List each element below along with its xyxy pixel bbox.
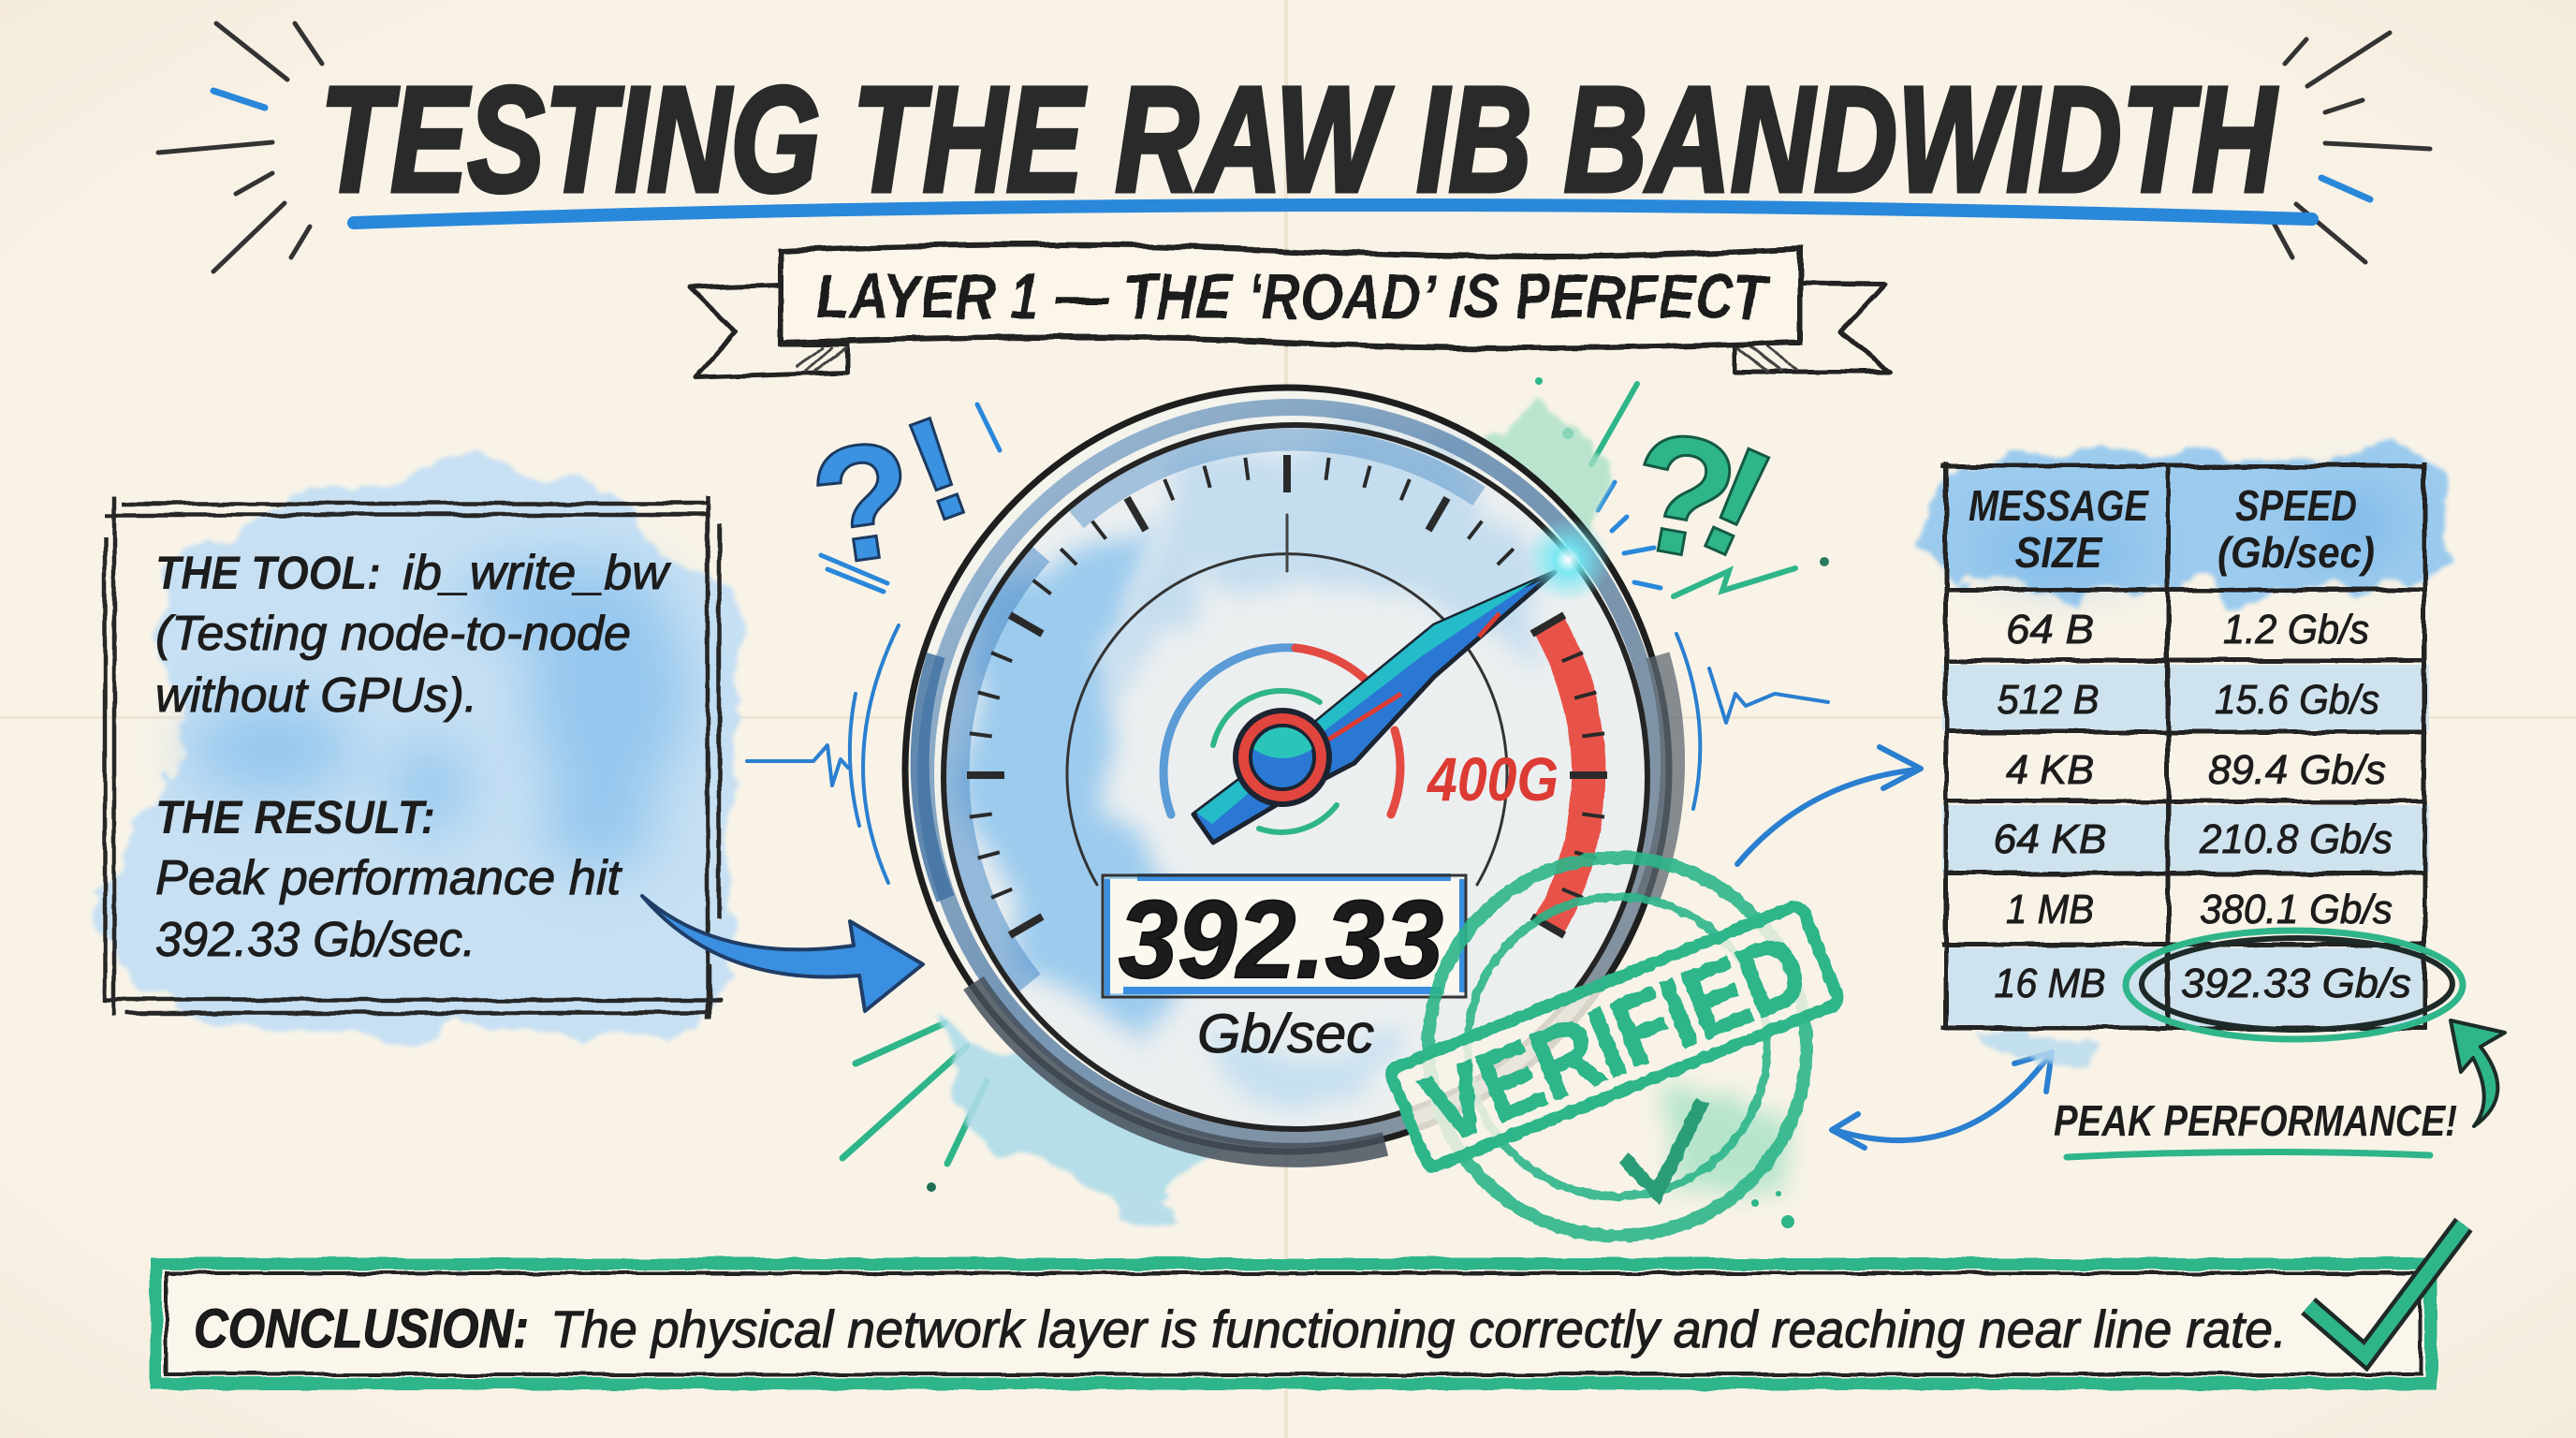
tool text: THE TOOL: — [155, 547, 381, 599]
red zone — [1548, 624, 1588, 926]
table rows: 64 B — [2006, 607, 2094, 653]
conclusion panel — [156, 1225, 2464, 1384]
arrow: gauge to table — [1737, 747, 1921, 864]
peak performance label: PEAK PERFORMANCE! — [2054, 1096, 2457, 1145]
arrow: stamp to table (double headed) — [1832, 1052, 2052, 1148]
blue question and exclamation marks: ? — [801, 406, 926, 601]
stamp banner — [1389, 903, 1842, 1173]
data table — [1919, 449, 2463, 1063]
result text: 392.33 Gb/sec. — [155, 913, 476, 967]
tool text: (Testing node-to-node — [155, 607, 631, 661]
vibration and pulse lines — [747, 625, 1828, 883]
wash darker patches — [187, 562, 688, 871]
peak value highlight — [2126, 931, 2463, 1039]
gauge — [905, 388, 1673, 1155]
title sunburst strokes — [158, 23, 2430, 271]
table header: SIZE — [2014, 528, 2103, 577]
tool text: ib_write_bw — [402, 546, 672, 600]
ribbon banner — [691, 245, 1890, 377]
table header — [1969, 481, 2375, 577]
table rows: 64 KB — [1994, 816, 2106, 862]
arrow: label to peak value — [2451, 1020, 2505, 1126]
conclusion text: The physical network layer is functioning correctly and reaching near line rate. — [550, 1299, 2287, 1358]
table rows: 210.8 Gb/s — [2199, 816, 2393, 862]
verified stamp — [1389, 858, 1842, 1236]
gauge face — [905, 388, 1669, 1152]
table header: SPEED — [2235, 481, 2357, 530]
table washes — [1919, 449, 2452, 1063]
table rows: 512 B — [1998, 677, 2099, 723]
table rows: 15.6 Gb/s — [2215, 677, 2379, 723]
title underline — [354, 205, 2312, 223]
table rows: 392.33 Gb/s — [2181, 961, 2411, 1006]
table rows: 89.4 Gb/s — [2208, 747, 2386, 793]
watercolour splashes behind gauge — [936, 403, 1788, 1236]
readout number: 392.33 — [1119, 878, 1443, 1002]
400G label: 400G — [1426, 744, 1559, 814]
table header: (Gb/sec) — [2217, 528, 2375, 577]
green burst lines lower left — [842, 1023, 987, 1192]
panel frame — [105, 496, 721, 1020]
conclusion frame — [156, 1264, 2431, 1384]
table rows: 380.1 Gb/s — [2200, 887, 2393, 932]
table rows: 1 MB — [2006, 887, 2094, 932]
blue question and exclamation marks: ! — [886, 384, 988, 553]
needle — [1193, 572, 1555, 843]
tool text: without GPUs). — [155, 668, 477, 723]
table grid — [1941, 462, 2426, 1030]
ribbon text: LAYER 1 — THE ‘ROAD’ IS PERFECT — [816, 261, 1771, 332]
needle tip glow — [1525, 517, 1611, 603]
inner dial arcs — [1067, 515, 1507, 885]
gauge dial wash — [944, 425, 1647, 1129]
header wash patches — [1975, 496, 2396, 573]
watercolour wash — [84, 473, 744, 1039]
stamp word: VERIFIED — [1410, 913, 1822, 1166]
table rows: 16 MB — [1994, 961, 2106, 1006]
readout unit: Gb/sec — [1197, 1004, 1374, 1064]
conclusion text: CONCLUSION: — [194, 1299, 529, 1359]
conclusion check mark — [2308, 1225, 2464, 1356]
result text: Peak performance hit — [155, 851, 623, 905]
bezel band — [905, 388, 1673, 1155]
table row shading — [1942, 665, 2429, 1028]
tool text — [155, 546, 672, 723]
needle hub — [1236, 711, 1329, 804]
digital readout — [1103, 875, 1466, 1002]
green question and exclamation marks: ? — [1617, 395, 1750, 598]
table rows — [1994, 607, 2411, 1006]
result text: THE RESULT: — [155, 791, 435, 844]
table rows: 1.2 Gb/s — [2223, 607, 2369, 653]
table header: MESSAGE — [1969, 481, 2149, 530]
ink dots near stamp — [1751, 1191, 1794, 1228]
table rows: 4 KB — [2006, 747, 2094, 793]
result text — [155, 791, 623, 967]
green question and exclamation marks: ! — [1678, 413, 1795, 591]
green question and exclamation marks — [1535, 377, 1829, 598]
left panel: tool and result — [84, 473, 744, 1039]
stamp check mark — [1624, 1101, 1703, 1193]
blue question and exclamation marks — [801, 384, 1000, 601]
stamp rings — [1428, 858, 1807, 1236]
peak label underline — [2067, 1152, 2430, 1157]
dial ticks — [967, 455, 1607, 935]
arrow: result to gauge — [642, 896, 923, 1011]
